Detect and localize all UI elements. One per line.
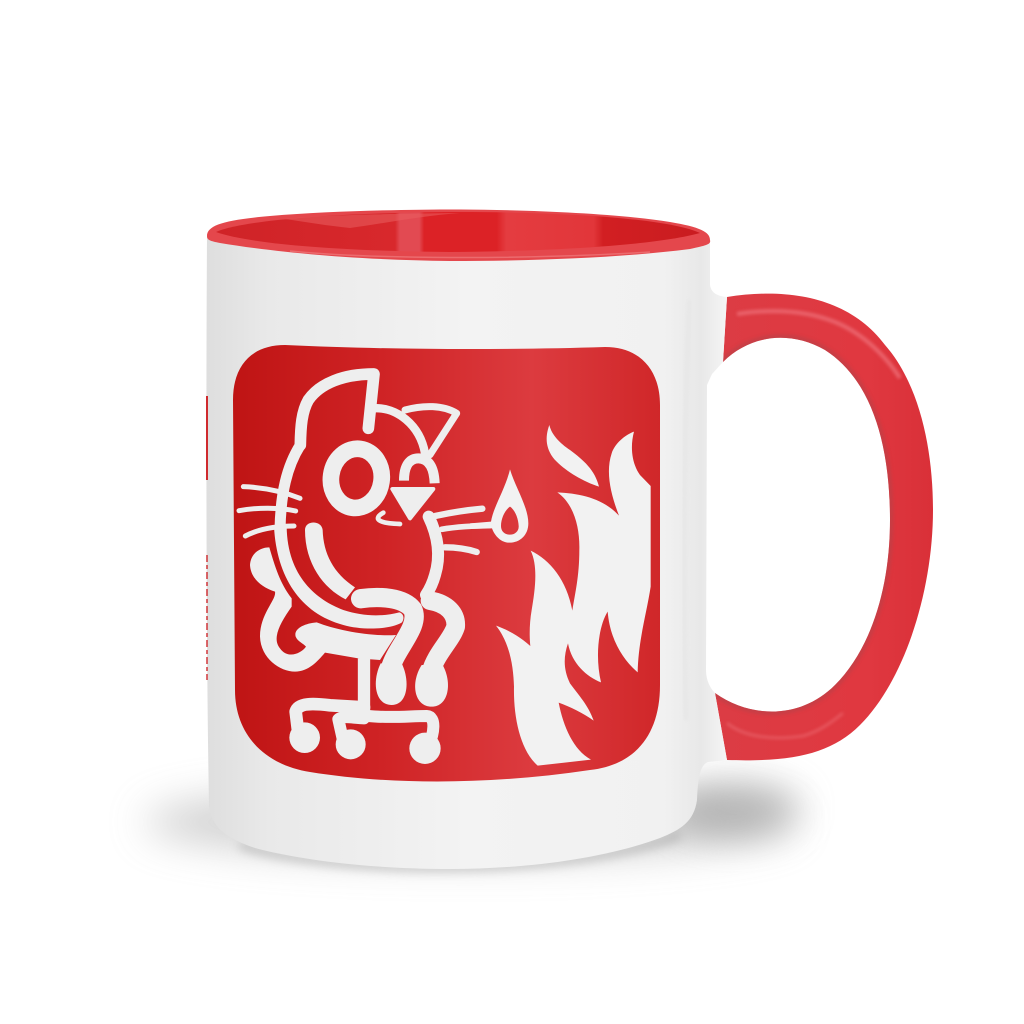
chair seat and back <box>250 547 396 672</box>
mouth <box>378 513 400 524</box>
product illustration: mug <box>144 210 933 880</box>
chair wheels <box>289 722 441 764</box>
rim and mug interior <box>207 210 710 261</box>
ground shadow <box>145 782 800 867</box>
red panel <box>233 345 660 782</box>
whiskers <box>239 487 300 536</box>
body highlights <box>684 300 690 720</box>
arm <box>305 522 355 599</box>
icon: flames <box>496 425 651 766</box>
left eye <box>327 445 386 511</box>
icon: water drop <box>470 469 528 543</box>
head top and ear <box>373 408 425 453</box>
icon: cat on office chair <box>239 374 490 764</box>
chest <box>426 517 438 595</box>
chair stem <box>345 658 382 715</box>
edge slivers of wrap-around artwork <box>206 396 208 680</box>
legs <box>361 598 414 670</box>
mug body <box>206 236 727 869</box>
nose <box>392 489 433 518</box>
main flame <box>496 432 651 766</box>
handle <box>715 294 933 760</box>
cat head and back <box>300 374 374 445</box>
chair base <box>296 704 364 733</box>
right eye <box>404 458 435 483</box>
flame wisp <box>547 425 599 487</box>
